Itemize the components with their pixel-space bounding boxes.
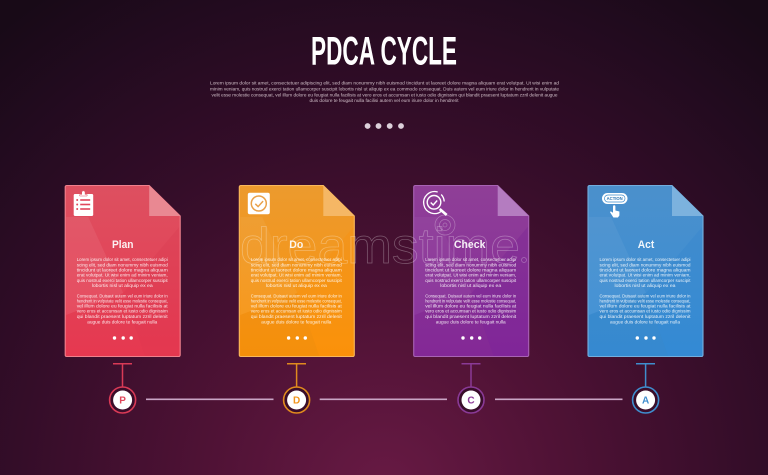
- marker: D: [284, 364, 310, 413]
- intro text block: velit esse molestie consequat, vel illum dolore eu feugiat nulla facilisis at vero eros et accumsan et iusto odio dignissim qui blandit praesent luptatum zzril delenit augue: [212, 92, 558, 97]
- body text: plan: Consequat. Duisaut autem vel eum iriure dolor in: [77, 293, 168, 299]
- icon: action button with hand: ACTION: [607, 196, 623, 201]
- intro text block: [210, 81, 559, 103]
- body text: do: Lorem ipsum dolor sit amet, consectetuer adipi: [251, 257, 342, 263]
- icon: magnifier check: [424, 192, 447, 215]
- marker: P: P: [119, 396, 126, 407]
- body text: plan: vero eros et accumsan et iusto odio dignissim: [77, 309, 168, 315]
- body text: plan: qui blandit praesent luptatum zzril delenit: [77, 314, 168, 320]
- marker: A: [633, 364, 659, 413]
- marker: P: [110, 364, 136, 413]
- body text: check: erat volutpat. Ut wisi enim ad minim veniam,: [425, 273, 516, 279]
- panel: plan: [65, 186, 180, 356]
- card dots: [636, 336, 656, 340]
- body text: check: scing elit, sed diam nonummy nibh euismod: [425, 262, 517, 268]
- body text: act: Lorem ipsum dolor sit amet, consectetuer adipi: [600, 257, 690, 263]
- body text: check: hendrerit in vulputate velit esse molestie consequat,: [425, 298, 516, 304]
- body text: plan: tincidunt ut laoreet dolore magna aliquam: [77, 268, 168, 274]
- body text: check: tincidunt ut laoreet dolore magna aliquam: [425, 268, 516, 274]
- marker: C: C: [467, 396, 475, 407]
- body text: do: quis nostrud exerci tation ullamcorper suscipit: [251, 278, 342, 284]
- intro text block: minim veniam, quis nostrud exerci tation ullamcorper suscipit lobortis nisl ut aliquip ex ea commodo consequat. Duis autem vel eum iriure dolor in hendrerit in vulputate: [210, 87, 559, 92]
- body text: do: hendrerit in vulputate velit esse molestie consequat,: [251, 298, 342, 304]
- body text: do: tincidunt ut laoreet dolore magna aliquam: [251, 268, 342, 274]
- body text: plan: erat volutpat. Ut wisi enim ad minim veniam,: [77, 273, 168, 279]
- body text: act: vero eros et accumsan et iusto odio dignissim: [600, 309, 690, 315]
- panel: act: [588, 186, 703, 356]
- heading: plan: Plan: [112, 239, 134, 251]
- body text: act: erat volutpat. Ut wisi enim ad minim veniam,: [600, 273, 690, 279]
- body text: plan: hendrerit in vulputate velit esse molestie consequat,: [77, 298, 168, 304]
- body text: do: lobortis nisl ut aliquip ex ea: [266, 283, 327, 289]
- heading: act: Act: [638, 239, 655, 251]
- body text: act: lobortis nisl ut aliquip ex ea: [614, 283, 676, 289]
- body text: plan: vel illum dolore eu feugiat nulla facilisis at: [77, 304, 168, 310]
- icon: check badge: [248, 193, 270, 214]
- marker: C: [458, 364, 484, 413]
- body text: act: [600, 257, 691, 325]
- card dots: [461, 336, 481, 340]
- body text: act: qui blandit praesent luptatum zzril delenit: [600, 314, 691, 320]
- pagination dots: [365, 123, 404, 129]
- body text: plan: augue duis dolore te feugait nulla: [87, 319, 158, 325]
- body text: check: vero eros et accumsan et iusto odio dignissim: [425, 309, 516, 315]
- body text: do: vel illum dolore eu feugiat nulla facilisis at: [251, 304, 342, 310]
- watermark: dreamstime: [240, 218, 520, 274]
- timeline connector lines: [146, 398, 622, 400]
- body text: do: vero eros et accumsan et iusto odio dignissim: [251, 309, 342, 315]
- body text: act: quis nostrud exerci tation ullamcorper suscipit: [600, 278, 691, 284]
- body text: check: augue duis dolore te feugait nulla: [436, 319, 506, 325]
- card dots: [287, 336, 307, 340]
- body text: do: qui blandit praesent luptatum zzril delenit: [251, 314, 342, 320]
- title: PDCA CYCLE: [311, 30, 457, 74]
- body text: check: qui blandit praesent luptatum zzril delenit: [425, 314, 517, 320]
- icon: action button with hand: [602, 193, 628, 218]
- panel: check: [414, 186, 529, 356]
- body text: act: augue duis dolore te feugait nulla: [610, 319, 680, 325]
- marker: D: D: [293, 396, 300, 407]
- body text: check: quis nostrud exerci tation ullamcorper suscipit: [425, 278, 517, 284]
- body text: do: [251, 257, 342, 325]
- body text: plan: quis nostrud exerci tation ullamcorper suscipit: [77, 278, 168, 284]
- card dots: [113, 336, 133, 340]
- body text: do: erat volutpat. Ut wisi enim ad minim veniam,: [251, 273, 342, 279]
- intro text block: Lorem ipsum dolor sit amet, consectetuer adipiscing elit, sed diam nonummy nibh euismod tincidunt ut laoreet dolore magna aliquam erat volutpat. Ut wisi enim ad: [210, 81, 559, 86]
- intro text block: duis dolore te feugait nulla facilisi autem vel eum iriure dolor in hendrerit: [310, 98, 459, 103]
- heading: do: Do: [289, 239, 304, 251]
- body text: plan: scing elit, sed diam nonummy nibh euismod: [77, 262, 168, 268]
- body text: do: Consequat. Duisaut autem vel eum iriure dolor in: [251, 293, 342, 299]
- heading: check: Check: [454, 239, 486, 251]
- body text: act: hendrerit in vulputate velit esse molestie consequat,: [600, 298, 690, 304]
- body text: do: augue duis dolore te feugait nulla: [261, 319, 332, 325]
- body text: act: scing elit, sed diam nonummy nibh euismod: [600, 262, 691, 268]
- body text: act: vel illum dolore eu feugiat nulla facilisis at: [600, 304, 691, 310]
- body text: check: Lorem ipsum dolor sit amet, consectetuer adipi: [425, 257, 516, 263]
- body text: check: Consequat. Duisaut autem vel eum iriure dolor in: [425, 293, 516, 299]
- body text: plan: [77, 257, 168, 325]
- body text: act: tincidunt ut laoreet dolore magna aliquam: [600, 268, 691, 274]
- body text: check: vel illum dolore eu feugiat nulla facilisis at: [425, 304, 517, 310]
- body text: do: scing elit, sed diam nonummy nibh euismod: [251, 262, 342, 268]
- body text: check: lobortis nisl ut aliquip ex ea: [440, 283, 502, 289]
- body text: plan: Lorem ipsum dolor sit amet, consectetuer adipi: [77, 257, 168, 263]
- body text: check: [425, 257, 517, 325]
- body text: plan: lobortis nisl ut aliquip ex ea: [92, 283, 153, 289]
- body text: act: Consequat. Duisaut autem vel eum iriure dolor in: [600, 293, 691, 299]
- marker: A: A: [642, 396, 649, 407]
- panel: do: [239, 186, 354, 356]
- icon: clipboard: [74, 191, 93, 216]
